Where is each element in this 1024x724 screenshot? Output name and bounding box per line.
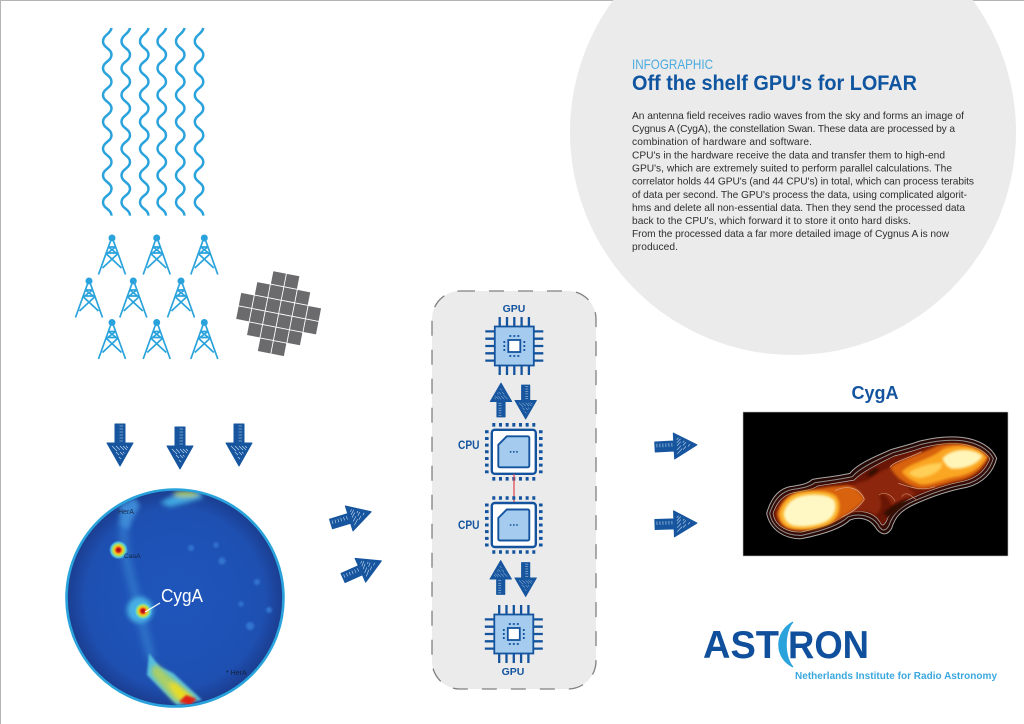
text block: description: back to the CPU's, which forward it to store it onto hard disks. — [632, 216, 911, 227]
text block: description: correlator holds 44 GPU's (and 44 CPU's) in total, which can process terabits — [632, 176, 974, 188]
antenna field — [76, 234, 218, 359]
label: GPU top: GPU — [503, 303, 525, 315]
image heading: CygA — [851, 383, 899, 403]
ring — [66, 490, 284, 706]
text block: description: of data per second. The GPU's process the data, using complicated algorit- — [632, 190, 967, 201]
label: HerA bottom: * HerA — [226, 670, 247, 677]
text block: description: combination of hardware and software. — [632, 137, 812, 148]
inner contour lines — [835, 488, 864, 517]
text block: description: An antenna field receives radio waves from the sky and forms an image of — [632, 111, 964, 122]
label: CygA: CygA — [161, 586, 203, 606]
orange lobes — [777, 485, 864, 530]
arrows: antennas to sky map — [107, 424, 252, 469]
milky way band — [124, 520, 151, 658]
icon: CPU upper — [487, 425, 541, 479]
outer contours — [767, 437, 997, 539]
title: Off the shelf GPU's for LOFAR — [632, 72, 917, 95]
icon: GPU top — [485, 317, 543, 375]
label: GPU bottom: GPU — [502, 666, 524, 678]
panel: correlator dashed box — [432, 291, 596, 689]
icon: GPU bottom — [485, 605, 543, 663]
link between CPUs — [513, 474, 515, 503]
text block: description: hms and delete all non-essential data. Then they send the processed data — [632, 203, 965, 214]
top light patches — [120, 491, 203, 530]
wordmark RON: RON — [788, 624, 869, 667]
text block: description: From the processed data a far more detailed image of Cygnus A is now — [632, 229, 950, 240]
leader line — [145, 603, 160, 612]
CygA source — [127, 597, 153, 623]
faint sources right side — [188, 542, 272, 630]
wordmark AST: AST — [703, 624, 779, 667]
label: CPU upper: CPU — [458, 440, 480, 452]
arrows: sky map to correlator — [327, 499, 387, 590]
antenna station tile grid — [231, 266, 326, 361]
label: HerA top: HerA — [118, 509, 134, 516]
arrows: correlator to image — [654, 432, 698, 537]
text block: description: GPU's, which are extremely suited to perform parallel calculations. The — [632, 164, 952, 174]
label: CasA: CasA — [124, 553, 141, 560]
panel: grey intro circle — [570, 0, 1016, 355]
mid red body — [835, 467, 917, 515]
notch and dark patch — [867, 468, 879, 476]
text block: description: produced. — [632, 242, 678, 253]
radio waves — [103, 28, 203, 216]
arrows: top pair — [490, 383, 536, 419]
bottom galactic plane — [147, 653, 202, 705]
logo bracket — [779, 622, 793, 667]
text block: description: CPU's in the hardware receive the data and transfer them to high-end — [632, 150, 945, 161]
arrows: bottom pair — [490, 560, 536, 597]
intro kicker: INFOGRAPHIC — [632, 56, 713, 72]
yellow lobes — [779, 491, 840, 530]
radio image of Cygnus A — [743, 412, 1008, 556]
icon: CPU lower — [487, 498, 541, 552]
text block: description: Cygnus A (CygA), the constellation Swan. These data are processed by a — [632, 124, 955, 135]
CasA source — [109, 540, 128, 560]
logo: ASTRON — [703, 622, 997, 682]
sky map of radio sources — [66, 490, 284, 706]
label: CPU lower: CPU — [458, 520, 480, 532]
tagline: Netherlands Institute for Radio Astronomy — [795, 671, 997, 682]
white lobes — [784, 495, 836, 526]
text block: description — [632, 111, 974, 253]
